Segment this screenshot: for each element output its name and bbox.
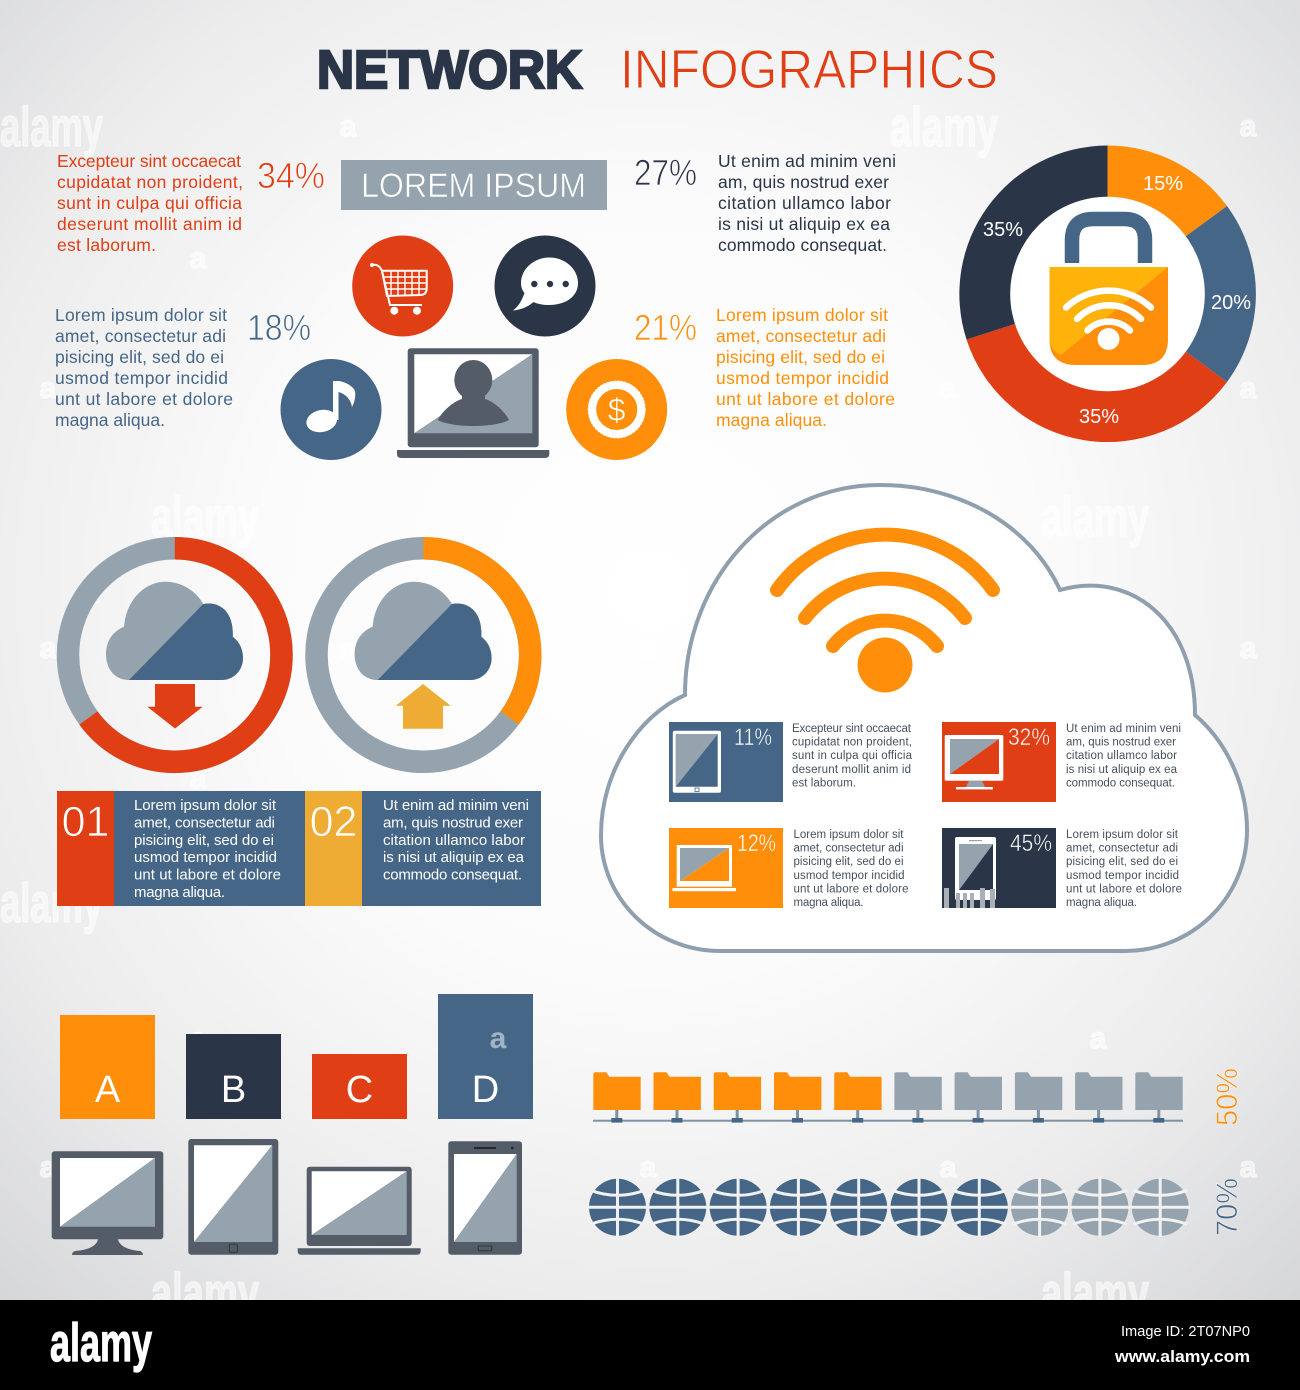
title — [317, 38, 998, 100]
text block: dark: commodo consequat. — [718, 235, 887, 255]
text: laptop: magna aliqua. — [794, 897, 864, 909]
watermark pattern: a — [640, 1151, 657, 1184]
text: phone: pisicing elit, sed do ei — [1066, 856, 1178, 868]
panel: step 02: Ut enim ad minim veni — [383, 797, 529, 814]
text block: orange: Lorem ipsum dolor sit — [716, 305, 888, 325]
donut label: 15%: 15% — [1143, 173, 1183, 195]
tile: phone 45%: 45% — [1010, 830, 1052, 857]
ring: upload cloud — [316, 548, 530, 762]
icon: tablet — [188, 1139, 278, 1255]
bar: D — [438, 994, 533, 1119]
tile: monitor 32%: 32% — [1008, 724, 1050, 751]
text block: orange: pisicing elit, sed do ei — [716, 347, 885, 367]
ring: download cloud — [68, 548, 282, 762]
text: phone — [1066, 829, 1182, 909]
bar: B: B — [221, 1069, 246, 1111]
watermark pattern: a — [1240, 372, 1257, 405]
text block: blue: pisicing elit, sed do ei — [55, 347, 224, 367]
donut label: 35% red: 35% — [1079, 406, 1119, 428]
tile: tablet 11%: 11% — [734, 724, 772, 751]
text: monitor: commodo consequat. — [1066, 777, 1175, 789]
text: monitor: Ut enim ad minim veni — [1066, 723, 1181, 735]
icon: laptop with user — [397, 348, 549, 458]
icon: cloud — [355, 582, 492, 680]
folder network: 50% — [593, 1072, 1183, 1123]
watermark pattern: alamy — [151, 1261, 259, 1324]
watermark pattern: alamy — [890, 871, 998, 934]
panel: step 01: 01 — [62, 798, 109, 846]
panel: big cloud — [601, 485, 1247, 951]
watermark pattern: alamy — [151, 485, 259, 548]
donut label: 20%: 20% — [1211, 292, 1251, 314]
watermark pattern: a — [1240, 1151, 1257, 1184]
text: phone: amet, consectetur adi — [1066, 843, 1178, 855]
icon: wifi — [777, 535, 993, 692]
panel: step 01: pisicing elit, sed do ei — [134, 832, 274, 849]
text: laptop — [794, 829, 908, 909]
panel: step 02: commodo consequat. — [383, 866, 522, 884]
text: phone: magna aliqua. — [1066, 897, 1137, 909]
watermark pattern: a — [1090, 762, 1107, 795]
title: NETWORK — [317, 40, 582, 100]
panel: step 01: Lorem ipsum dolor sit — [134, 797, 277, 814]
panel: step 01: amet, consectetur adi — [134, 814, 275, 832]
text: laptop: unt ut labore et dolore — [794, 883, 908, 895]
text: tablet: est laborum. — [792, 777, 856, 789]
text block: blue: unt ut labore et dolore — [55, 389, 233, 409]
text block: red: Excepteur sint occaecat — [57, 151, 241, 171]
donut chart: lock — [959, 146, 1256, 442]
watermark pattern: alamy — [1041, 485, 1149, 548]
text: laptop: usmod tempor incidid — [794, 870, 904, 882]
watermark pattern: alamy — [0, 95, 103, 158]
watermark pattern: alamy — [0, 871, 103, 934]
panel: step 02: am, quis nostrud exer — [383, 814, 523, 832]
icon: laptop — [298, 1167, 421, 1255]
bar: C — [312, 1054, 407, 1119]
text block: orange: usmod tempor incidid — [716, 368, 889, 388]
icon: monitor — [52, 1151, 163, 1255]
text block: red: est laborum. — [57, 235, 156, 255]
arrow: upload — [396, 684, 451, 729]
text: tablet: cupidatat non proident, — [792, 737, 912, 749]
icon: shopping cart — [352, 236, 453, 336]
donut label: 35% dark: 35% — [983, 219, 1023, 241]
watermark pattern: a — [1090, 242, 1107, 275]
text: tablet: Excepteur sint occaecat — [792, 723, 912, 735]
text: tablet: sunt in culpa qui officia — [792, 750, 913, 762]
bar: A — [60, 1015, 155, 1119]
footer bar: alamy — [50, 1313, 152, 1373]
watermark pattern: alamy — [1041, 1261, 1149, 1324]
watermark pattern: a — [340, 632, 357, 665]
text: tablet: deserunt mollit anim id — [792, 764, 911, 776]
text: laptop: amet, consectetur adi — [794, 843, 904, 855]
text block: blue — [55, 305, 233, 430]
banner: lorem ipsum: LOREM IPSUM — [361, 167, 586, 205]
text block: red: cupidatat non proident, — [57, 172, 243, 192]
bar: A: A — [95, 1069, 121, 1111]
bar: D: a — [490, 1022, 507, 1055]
stat: 18%: 18% — [247, 307, 311, 348]
text block: blue: Lorem ipsum dolor sit — [55, 305, 227, 325]
tile: tablet 11% — [669, 722, 783, 802]
watermark pattern: a — [190, 242, 207, 275]
text block: dark: am, quis nostrud exer — [718, 172, 889, 192]
text block: orange: unt ut labore et dolore — [716, 389, 895, 409]
watermark pattern: a — [40, 632, 57, 665]
panel: step 02: citation ullamco labor — [383, 832, 525, 849]
bar: C: C — [346, 1069, 373, 1111]
icon: padlock with wifi — [1050, 219, 1168, 365]
footer bar: www.alamy.com — [1114, 1347, 1250, 1366]
text: tablet — [792, 723, 913, 789]
text: monitor: citation ullamco labor — [1066, 750, 1177, 762]
icon: dollar coin — [566, 359, 667, 460]
panel: step 01 — [57, 791, 305, 906]
watermark pattern: a — [640, 632, 657, 665]
text: phone: usmod tempor incidid — [1066, 870, 1179, 882]
text block: red — [57, 151, 243, 255]
tile: phone 45% — [942, 828, 1056, 908]
watermark pattern: a — [40, 1151, 57, 1184]
stat: 34%: 34% — [257, 155, 325, 196]
icon: phone — [448, 1141, 522, 1255]
banner: lorem ipsum — [341, 160, 607, 210]
title: INFOGRAPHICS — [620, 38, 998, 100]
text: phone: Lorem ipsum dolor sit — [1066, 829, 1179, 841]
watermark pattern: a — [1240, 110, 1257, 143]
text: monitor: is nisi ut aliquip ex ea — [1066, 764, 1178, 776]
text block: dark — [718, 151, 896, 255]
stat: 50%: 50% — [1211, 1068, 1244, 1126]
bar: D: D — [472, 1069, 499, 1111]
panel: step 02: 02 — [310, 798, 357, 846]
icon: dollar coin: $ — [608, 392, 626, 428]
panel: step 01: magna aliqua. — [134, 884, 225, 901]
tile: laptop 12%: 12% — [737, 830, 776, 857]
watermark pattern: a — [340, 110, 357, 143]
text block: orange: magna aliqua. — [716, 410, 827, 430]
watermark pattern: a — [940, 372, 957, 405]
text block: dark: Ut enim ad minim veni — [718, 151, 896, 171]
watermark pattern: a — [190, 1022, 207, 1055]
bar chart: A B C D — [60, 994, 533, 1119]
text block: blue: magna aliqua. — [55, 410, 165, 430]
stat: 27%: 27% — [634, 152, 697, 193]
watermark pattern: alamy — [890, 95, 998, 158]
icon: music note — [280, 359, 382, 460]
text block: dark: citation ullamco labor — [718, 193, 891, 213]
stat: 70%: 70% — [1211, 1178, 1244, 1236]
text: phone: unt ut labore et dolore — [1066, 883, 1182, 895]
text block: dark: is nisi ut aliquip ex ea — [718, 214, 890, 234]
stat: 21%: 21% — [634, 307, 697, 348]
text block: orange: amet, consectetur adi — [716, 326, 886, 346]
tile: laptop 12% — [669, 828, 783, 908]
footer bar: Image ID: 2T07NP0 — [1121, 1323, 1250, 1340]
text block: blue: amet, consectetur adi — [55, 326, 226, 346]
footer bar — [0, 1300, 1300, 1390]
text: laptop: Lorem ipsum dolor sit — [794, 829, 904, 841]
panel: step 01: unt ut labore et dolore — [134, 866, 281, 884]
text block: red: deserunt mollit anim id — [57, 214, 242, 234]
panel: step 02: is nisi ut aliquip ex ea — [383, 849, 525, 866]
watermark pattern: a — [40, 372, 57, 405]
text block: blue: usmod tempor incidid — [55, 368, 228, 388]
bar: B — [186, 1034, 281, 1119]
text: laptop: pisicing elit, sed do ei — [794, 856, 904, 868]
icon: chat bubble — [494, 236, 596, 336]
tile: monitor 32% — [942, 722, 1056, 802]
text: monitor: am, quis nostrud exer — [1066, 737, 1176, 749]
icon: cloud — [106, 582, 243, 680]
panel: step 02 — [305, 791, 541, 906]
text block: red: sunt in culpa qui officia — [57, 193, 242, 213]
text: monitor — [1066, 723, 1181, 789]
watermark pattern: a — [1240, 632, 1257, 665]
watermark pattern: a — [1090, 1022, 1107, 1055]
text block: orange — [716, 305, 895, 430]
watermark pattern: a — [940, 1151, 957, 1184]
watermark pattern: a — [190, 762, 207, 795]
arrow: download — [147, 684, 203, 728]
panel: step 01: usmod tempor incidid — [134, 849, 277, 866]
globe row: 70% — [588, 1177, 1190, 1237]
watermark pattern: a — [940, 632, 957, 665]
